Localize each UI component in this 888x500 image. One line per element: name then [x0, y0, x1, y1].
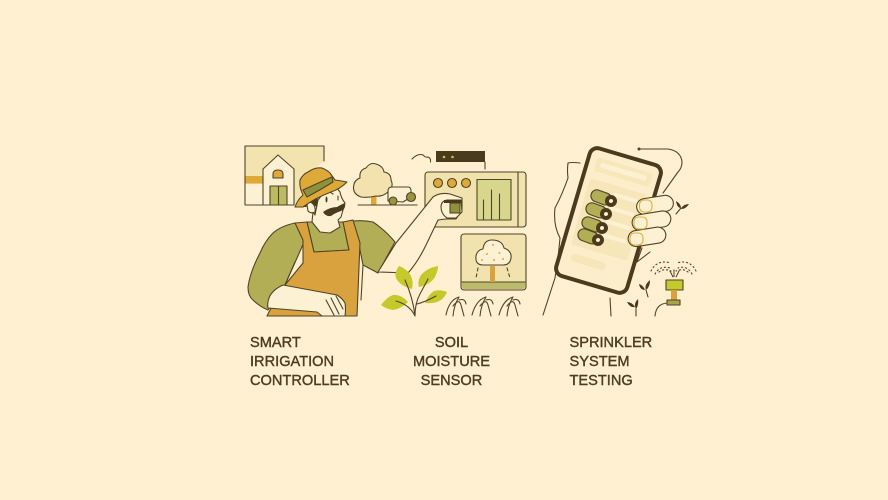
hand outline	[543, 162, 580, 315]
illustration: arm reaching to controller	[378, 172, 526, 273]
label: smart irrigation controller: CONTROLLER	[250, 373, 350, 389]
phone	[554, 146, 663, 295]
neck and face	[312, 182, 345, 233]
label: soil moisture sensor	[413, 335, 490, 389]
eye and brow	[325, 192, 333, 194]
panel: smart controller	[425, 172, 526, 227]
illustration: hand holding phone	[543, 146, 682, 316]
toggles	[576, 188, 619, 248]
icon: small sprouts	[627, 201, 689, 316]
panel: soil moisture tree	[461, 234, 526, 290]
chest	[307, 222, 349, 252]
label: sprinkler system testing: TESTING	[570, 373, 633, 389]
icon: status flag	[436, 151, 485, 169]
icon: sprinkler	[651, 262, 696, 316]
icon: tree and tractor	[353, 164, 417, 205]
label: soil moisture sensor: MOISTURE	[413, 354, 490, 370]
arm on apron	[268, 285, 346, 316]
label: sprinkler system testing: SYSTEM	[570, 354, 630, 370]
label: soil moisture sensor: SENSOR	[421, 373, 482, 389]
icon: bird	[412, 154, 431, 162]
right sleeve	[353, 221, 395, 273]
label: smart irrigation controller: SMART	[250, 335, 301, 351]
label: soil moisture sensor: SOIL	[435, 335, 468, 351]
label: sprinkler system testing: SPRINKLER	[570, 335, 652, 351]
icon: grass tufts	[446, 297, 520, 316]
label: smart irrigation controller: IRRIGATION	[250, 354, 334, 370]
shirt body and left sleeve	[248, 223, 305, 310]
hair	[297, 195, 318, 207]
label: sprinkler system testing	[570, 335, 652, 389]
illustration: farmer	[248, 168, 395, 316]
label: smart irrigation controller	[250, 335, 350, 389]
panel: farmhouse scene	[245, 146, 324, 205]
fingers	[627, 194, 675, 248]
ear	[307, 202, 315, 213]
hat	[295, 168, 347, 207]
apron	[267, 220, 360, 316]
icon: seedling	[381, 266, 447, 316]
moustache	[323, 203, 345, 216]
